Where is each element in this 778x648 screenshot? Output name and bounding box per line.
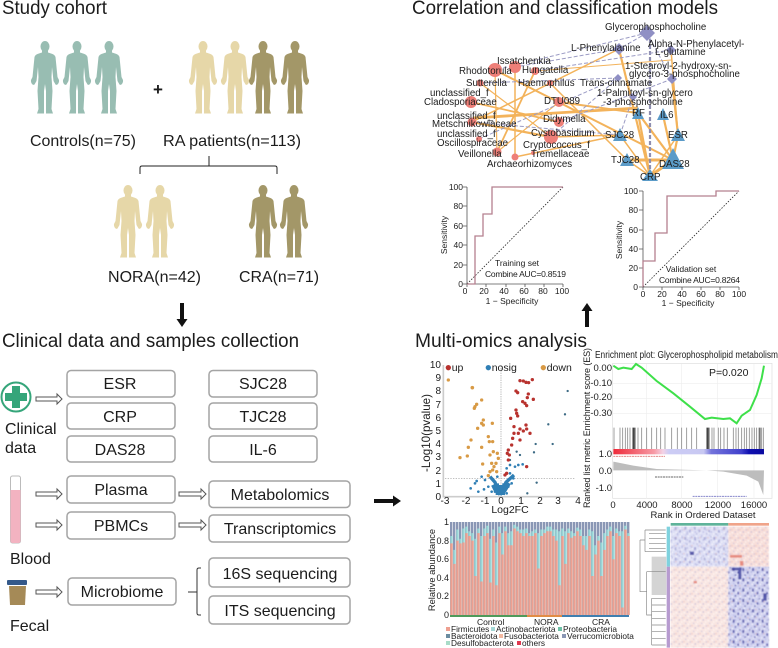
- network labels: Haemophilus: [518, 78, 575, 89]
- icon: control figures: [31, 41, 123, 114]
- chart: GSEA enrichment plot: 12000: [705, 500, 731, 511]
- chart: volcano plot: 0: [498, 496, 504, 507]
- chart: training ROC: 80: [454, 201, 463, 211]
- chart: training ROC: 0: [463, 286, 468, 296]
- chart: validation ROC: 60: [696, 289, 706, 299]
- chart: GSEA enrichment plot: Ranked list metric Enrichment score (ES): [582, 348, 592, 508]
- legend: phyla: Proteobacteria: [563, 624, 617, 634]
- box labels: [81, 376, 337, 620]
- icon: medical cross: [2, 382, 30, 412]
- network labels: Didymella: [543, 114, 586, 125]
- network labels: -3-phosphocholine: [603, 97, 683, 108]
- chart: volcano plot: down: [547, 362, 572, 374]
- chart: validation ROC: 80: [715, 289, 725, 299]
- chart: relative abundance stacked bars: [427, 517, 634, 648]
- chart: GSEA enrichment plot: -0.30: [590, 408, 612, 419]
- network labels: Oscillospiraceae: [437, 138, 508, 149]
- heading: clinical data and samples: Clinical data and samples collection: [2, 331, 299, 352]
- chart: volcano plot: [420, 360, 581, 516]
- panel: correlation and classification models: [412, 0, 746, 308]
- network labels: Rhodotorula: [459, 66, 512, 77]
- box labels: Microbiome: [81, 584, 163, 601]
- chart: volcano plot: 3: [435, 452, 441, 463]
- chart: GSEA enrichment plot: 16000: [741, 500, 767, 511]
- icon: blood tube: [10, 476, 20, 543]
- network labels: Tremellaceae: [531, 149, 589, 160]
- chart: volcano plot: 0: [435, 492, 441, 503]
- legend: phyla: Verrucomicrobiota: [567, 631, 634, 641]
- chart: volcano plot: nosig: [492, 362, 517, 374]
- panel: study cohort: [2, 0, 319, 286]
- chart: training ROC: 100: [449, 182, 463, 192]
- label: blood: Blood: [10, 551, 51, 568]
- chart: training ROC: 20: [454, 260, 463, 270]
- chart: training ROC: Training set: [495, 258, 540, 268]
- chart: GSEA enrichment plot: 0.00: [594, 363, 612, 374]
- chart: volcano plot: 1: [435, 479, 441, 490]
- network labels: Metschnikowiaceae: [432, 119, 517, 130]
- network labels: CRP: [640, 172, 660, 183]
- chart: GSEA enrichment plot: -0.10: [590, 378, 612, 389]
- box labels: PBMCs: [94, 518, 148, 535]
- chart: validation ROC: 100: [624, 186, 638, 196]
- chart: GSEA enrichment plot: 1.0: [599, 449, 612, 460]
- network labels: SJC28: [605, 130, 634, 141]
- chart: relative abundance stacked bars: 0.4: [436, 573, 449, 583]
- legend: phyla: Bacteroidota: [451, 631, 498, 641]
- chart: volcano plot: 8: [435, 386, 441, 397]
- network labels: Cystobasidium: [531, 128, 595, 139]
- hollow arrows from sources: [36, 394, 206, 597]
- network labels: L-glutamine: [655, 47, 706, 58]
- chart: relative abundance stacked bars: 0.2: [436, 591, 449, 601]
- box labels: 16S sequencing: [223, 566, 337, 583]
- chart: volcano plot: 10: [430, 360, 441, 371]
- network labels: Archaeorhizomyces: [487, 159, 572, 170]
- box labels: DAS28: [95, 442, 145, 459]
- chart: GSEA enrichment plot: 0.0: [599, 466, 612, 477]
- chart: volcano plot: 9: [435, 373, 441, 384]
- chart: relative abundance stacked bars: 1: [444, 517, 449, 527]
- chart: GSEA enrichment plot: -0.20: [590, 392, 612, 403]
- chart: validation ROC: Sensitivity: [614, 220, 624, 259]
- chart: relative abundance stacked bars: Control: [477, 617, 505, 627]
- chart: GSEA enrichment plot: 4000: [636, 500, 658, 511]
- chart: validation ROC: 40: [629, 244, 638, 254]
- arrow: samples to multi-omics: [374, 496, 401, 506]
- chart: volcano plot: 4: [435, 439, 441, 450]
- heading: multi-omics: Multi-omics analysis: [415, 331, 587, 352]
- chart: training ROC: 40: [499, 286, 509, 296]
- chart: volcano plot: -Log10(pvalue): [420, 394, 433, 472]
- label: clinical data: data: [5, 440, 36, 457]
- network labels: Cryptococcus_f: [523, 140, 590, 151]
- chart: validation ROC: 20: [629, 263, 638, 273]
- chart: training ROC: [439, 182, 569, 306]
- network labels: unclassified_f: [437, 129, 496, 140]
- network labels: ESR: [668, 130, 688, 141]
- legend: phyla: [446, 624, 634, 648]
- chart: training ROC: 20: [479, 286, 489, 296]
- network labels: IL6: [660, 110, 673, 121]
- network labels: Hungatella: [522, 65, 569, 76]
- icon: fecal cup: [7, 580, 27, 605]
- chart: training ROC: 80: [538, 286, 548, 296]
- box labels: IL-6: [249, 442, 277, 459]
- arrow: multi-omics to models: [582, 303, 592, 327]
- chart: volcano plot: 2: [435, 466, 441, 477]
- chart: volcano plot: -3: [441, 496, 450, 507]
- chart: validation ROC: Validation set: [666, 264, 717, 274]
- icon: CRA figures: [249, 185, 308, 258]
- network labels: DAS28: [659, 159, 690, 170]
- chart: volcano plot: 5: [435, 426, 441, 437]
- chart: training ROC: 100: [555, 286, 569, 296]
- network labels: [424, 22, 744, 183]
- box labels: SJC28: [239, 376, 287, 393]
- network edges: [471, 33, 678, 176]
- chart: volcano plot: Log2FC: [491, 504, 529, 516]
- group strip: [450, 615, 629, 617]
- label: fecal: Fecal: [10, 618, 49, 635]
- chart: training ROC: 60: [519, 286, 529, 296]
- chart: training ROC: 60: [454, 221, 463, 231]
- panel: multi-omics analysis: [415, 331, 778, 648]
- clinical nodes: [613, 107, 685, 181]
- chart: validation ROC: 0: [641, 289, 646, 299]
- chart: relative abundance stacked bars: Relative abundance: [427, 529, 437, 611]
- chart: training ROC: Combine AUC=0.8519: [485, 269, 566, 279]
- plus sign: +: [153, 80, 163, 99]
- network labels: Cladosporiaceae: [424, 97, 497, 108]
- chart: volcano plot: 4: [575, 496, 581, 507]
- network labels: 1-Stearoyl-2-hydroxy-sn-: [625, 61, 732, 72]
- bracket: RA subgroups: [140, 156, 277, 174]
- chart: volcano plot: -1: [481, 496, 490, 507]
- icon: RA patient figures: [189, 41, 309, 114]
- chart: training ROC: 40: [454, 240, 463, 250]
- chart: volcano plot: 3: [555, 496, 561, 507]
- network labels: glycero-3-phosphocholine: [629, 69, 740, 80]
- network labels: L-Phenylalanine: [571, 43, 640, 54]
- network labels: Issatchenkia: [497, 56, 551, 67]
- network labels: TJC28: [611, 155, 640, 166]
- microbe nodes: [465, 61, 564, 160]
- legend: phyla: Actinobacteriota: [496, 624, 556, 634]
- label: CRA: CRA(n=71): [239, 269, 319, 286]
- icon: NORA figures: [114, 185, 174, 258]
- chart: relative abundance stacked bars: NORA: [534, 617, 559, 627]
- bracket: microbiome: [188, 568, 201, 615]
- network labels: Glycerophosphocholine: [605, 22, 706, 33]
- chart: relative abundance stacked bars: CRA: [592, 617, 610, 627]
- label: controls: Controls(n=75): [30, 133, 136, 150]
- chart: GSEA enrichment plot: -1.0: [596, 483, 612, 494]
- network labels: Sutterella: [466, 78, 508, 89]
- network labels: RF: [632, 108, 645, 119]
- box labels: Plasma: [94, 482, 148, 499]
- chart: relative abundance stacked bars: 0: [444, 610, 449, 620]
- chart: volcano plot: 7: [435, 400, 441, 411]
- chart: heatmap with dendrogram: [640, 523, 769, 648]
- chart: GSEA enrichment plot: [582, 348, 778, 521]
- arrow: cohort to samples: [176, 303, 188, 327]
- chart: validation ROC: 20: [657, 289, 667, 299]
- box labels: ITS sequencing: [224, 603, 336, 620]
- chart: volcano plot: -2: [462, 496, 471, 507]
- chart: GSEA enrichment plot: Rank in Ordered Dataset: [650, 510, 756, 521]
- label: clinical data: Clinical: [5, 421, 57, 438]
- network labels: Veillonella: [458, 149, 502, 160]
- box labels: Metabolomics: [231, 487, 329, 504]
- chart: validation ROC: 1 − Specificity: [662, 298, 715, 308]
- network labels: unclassified_f: [437, 111, 496, 122]
- chart: validation ROC: 60: [629, 225, 638, 235]
- legend: phyla: Desulfobacterota: [451, 638, 514, 648]
- network labels: Alpha-N-Phenylacetyl-: [648, 39, 744, 50]
- legend: phyla: Firmicutes: [451, 624, 489, 634]
- chart: relative abundance stacked bars: 0.6: [436, 554, 449, 564]
- chart: validation ROC: 100: [732, 289, 746, 299]
- network labels: 1-Palmitoyl-sn-glycero: [597, 88, 693, 99]
- chart: GSEA enrichment plot: 8000: [671, 500, 693, 511]
- box labels: ESR: [104, 376, 136, 393]
- chart: validation ROC: Combine AUC=0.8264: [659, 275, 740, 285]
- chart: training ROC: 0: [458, 279, 463, 289]
- box labels: Transcriptomics: [224, 521, 336, 538]
- chart: GSEA enrichment plot: 0: [610, 500, 616, 511]
- chart: volcano plot: up: [452, 362, 464, 374]
- chart: volcano plot: 6: [435, 413, 441, 424]
- box labels: TJC28: [239, 409, 287, 426]
- label: RA patients: RA patients(n=113): [163, 133, 301, 150]
- network labels: unclassified_f: [430, 88, 489, 99]
- metabolite nodes: [613, 25, 677, 101]
- chart: volcano plot: 1: [518, 496, 524, 507]
- chart: validation ROC: 0: [633, 282, 638, 292]
- box labels: CRP: [103, 409, 137, 426]
- chart: relative abundance stacked bars: 0.8: [436, 536, 449, 546]
- network labels: Trans-cinnamate: [580, 78, 652, 89]
- network labels: DTU089: [544, 96, 580, 107]
- legend: phyla: Fusobacteriota: [504, 631, 559, 641]
- chart: validation ROC: [614, 186, 746, 308]
- clinical boxes: [67, 370, 350, 624]
- label: NORA: NORA(n=42): [108, 269, 201, 286]
- chart: validation ROC: 80: [629, 205, 638, 215]
- panel: clinical data and samples collection: [2, 331, 350, 635]
- chart: validation ROC: 40: [677, 289, 687, 299]
- chart: volcano plot: 2: [537, 496, 543, 507]
- chart: training ROC: Sensitivity: [439, 215, 449, 254]
- chart: GSEA enrichment plot: P=0.020: [709, 367, 749, 379]
- legend: phyla: others: [522, 638, 545, 648]
- chart: training ROC: 1 − Specificity: [486, 296, 539, 306]
